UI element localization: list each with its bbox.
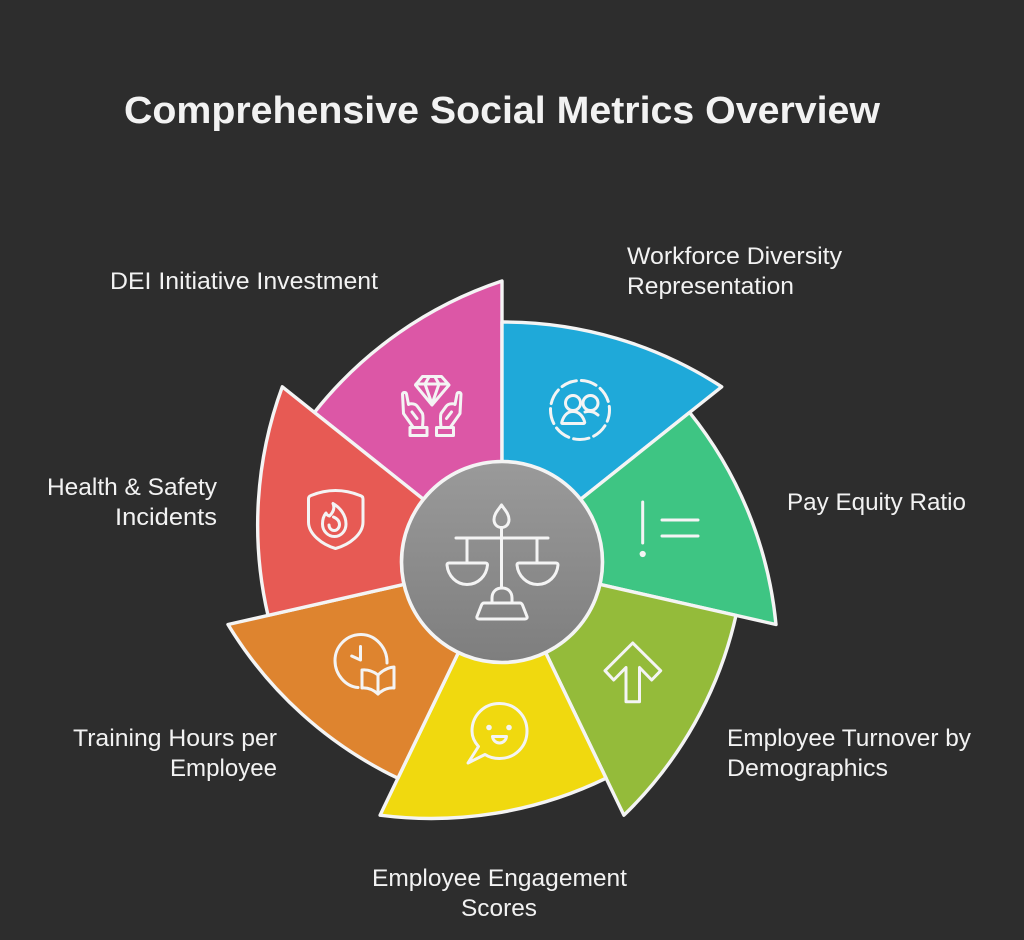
label: Employee Engagement Scores (372, 865, 627, 922)
label: Health & Safety Incidents: Incidents (115, 504, 217, 531)
label: Health & Safety Incidents: Health & Safety (47, 474, 217, 501)
wedge: Workforce Diversity Representation (502, 322, 722, 562)
label: Training Hours per Employee: Training Hours per (73, 725, 277, 752)
icon: up arrow (605, 643, 661, 702)
label: Employee Turnover by Demographics (727, 725, 971, 782)
icon: hands holding diamond (402, 376, 461, 436)
wedge: Employee Turnover by Demographics (502, 562, 736, 815)
label: Workforce Diversity Representation: Representation (627, 273, 794, 300)
title: Comprehensive Social Metrics Overview (124, 90, 880, 132)
label: Training Hours per Employee: Employee (170, 755, 277, 782)
wedge: Employee Engagement Scores (380, 562, 606, 818)
label: Employee Turnover by Demographics: Demographics (727, 755, 888, 782)
icon: clock and open book (335, 634, 394, 694)
label: Workforce Diversity Representation (627, 243, 842, 300)
label: Employee Turnover by Demographics: Employee Turnover by (727, 725, 971, 752)
icon: shield with flame (308, 491, 363, 548)
icon: exclamation and equals (641, 502, 698, 556)
icon: people in dashed circle (550, 380, 610, 440)
label: Training Hours per Employee (73, 725, 277, 782)
label: DEI Initiative Investment: DEI Initiative Investment (110, 268, 378, 295)
label: Workforce Diversity Representation: Workforce Diversity (627, 243, 842, 270)
wedge: Training Hours per Employee (228, 562, 502, 778)
label: Health & Safety Incidents (47, 474, 217, 531)
icon: balance scale (447, 505, 558, 619)
label: Employee Engagement Scores: Employee Engagement (372, 865, 627, 892)
wedge: DEI Initiative Investment (314, 281, 502, 562)
label: Employee Engagement Scores: Scores (461, 895, 537, 922)
wedge: Health & Safety Incidents (258, 387, 502, 615)
central hub circle (402, 462, 602, 662)
label: Pay Equity Ratio: Pay Equity Ratio (787, 489, 966, 516)
wedge: Pay Equity Ratio (502, 412, 776, 624)
icon: smiling speech bubble (468, 704, 527, 763)
